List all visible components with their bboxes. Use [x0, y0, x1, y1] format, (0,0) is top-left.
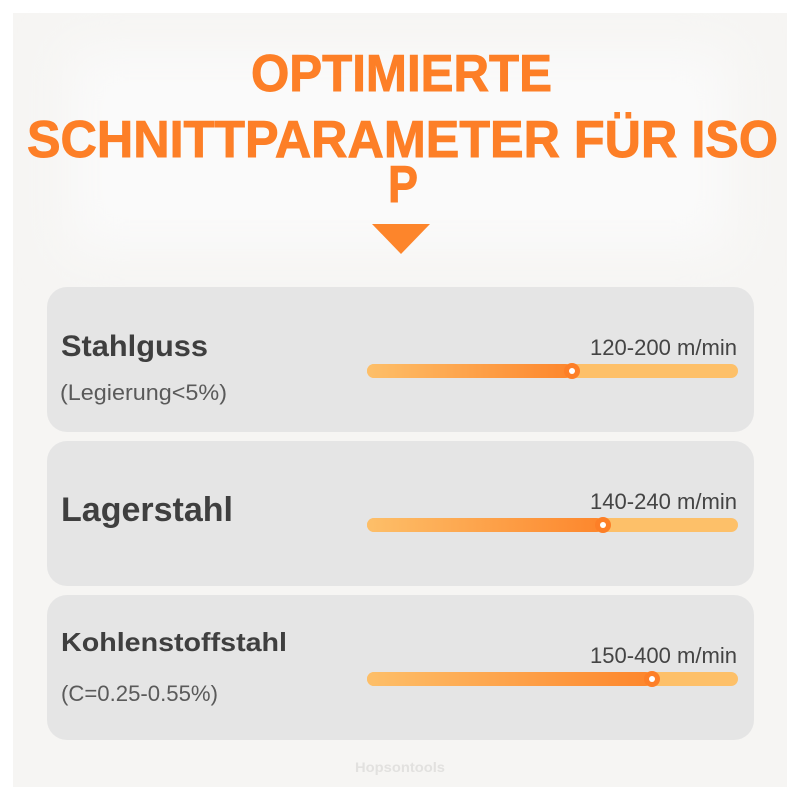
speed value: 150-400 m/min — [590, 643, 737, 668]
panel: Kohlenstoffstahl — [47, 595, 754, 740]
speed value: 120-200 m/min — [590, 335, 737, 360]
arrow pointing down — [372, 224, 430, 254]
slider: 140-240 m/min — [367, 517, 738, 533]
title: OPTIMIERTE — [251, 45, 552, 103]
slider: 150-400 m/min — [367, 671, 738, 687]
note: carbon content: (C=0.25-0.55%) — [61, 681, 218, 706]
note: alloy content: (Legierung<5%) — [60, 380, 227, 405]
heading: Lagerstahl: Lagerstahl — [61, 491, 233, 529]
heading: Stahlguss: Stahlguss — [61, 330, 208, 363]
speed value: 140-240 m/min — [590, 489, 737, 514]
title — [27, 45, 778, 214]
title: SCHNITTPARAMETER FÜR ISO — [27, 111, 778, 169]
heading: Kohlenstoffstahl: Kohlenstoffstahl — [61, 627, 287, 657]
panel: Lagerstahl — [47, 441, 754, 586]
panel: Stahlguss — [47, 287, 754, 432]
slider: 120-200 m/min — [367, 363, 738, 379]
watermark: Hopsontools — [355, 759, 445, 775]
title: P — [388, 156, 418, 214]
